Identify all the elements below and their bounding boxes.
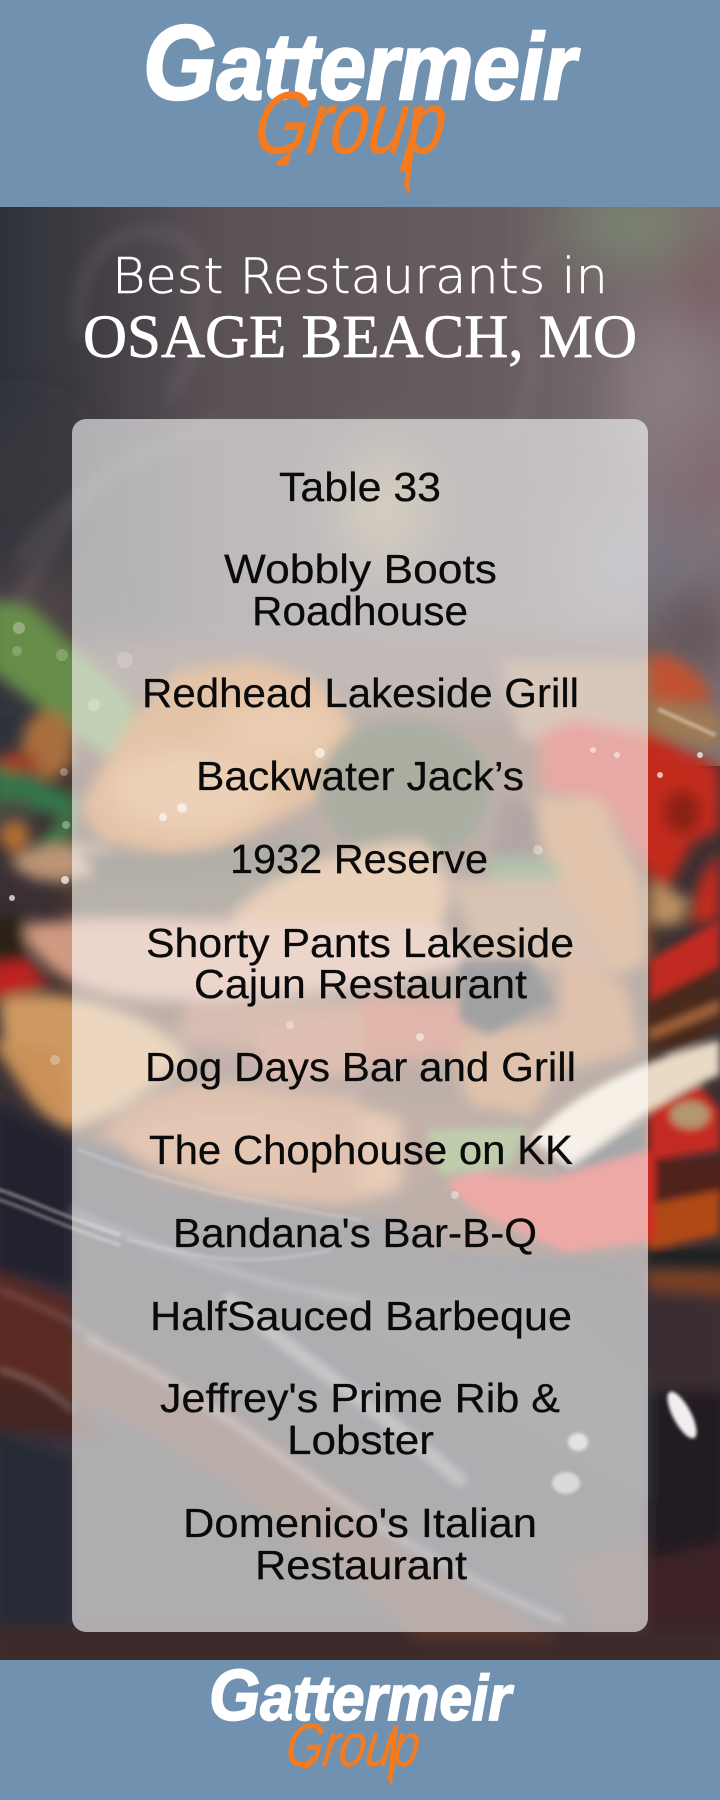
restaurant names: Shorty Pants Lakeside	[146, 920, 574, 966]
logo: header: Gattermeir	[143, 4, 580, 122]
restaurant names: Bandana's Bar-B-Q	[173, 1210, 537, 1256]
logo: footer	[209, 1656, 514, 1787]
potatoes	[0, 994, 190, 1130]
logo: header	[143, 4, 580, 195]
top right of food	[500, 660, 648, 740]
left greens	[0, 600, 150, 760]
logo: header: Group	[249, 73, 453, 172]
dark top-left	[0, 915, 28, 965]
restaurant names: Redhead Lakeside Grill	[142, 670, 579, 716]
title	[83, 248, 637, 371]
dark gap	[495, 800, 541, 857]
grey hole	[555, 1128, 644, 1171]
title: Best Restaurants in	[112, 248, 608, 305]
pan	[0, 1097, 720, 1670]
shrimp 1	[80, 660, 353, 857]
restaurant names: Backwater Jack’s	[196, 753, 524, 799]
restaurant names: Wobbly Boots	[224, 546, 497, 592]
shrimp 2	[233, 843, 448, 925]
broccoli	[320, 720, 490, 860]
restaurant names: Jeffrey's Prime Rib &	[160, 1375, 560, 1421]
ring piece	[458, 955, 640, 1115]
restaurant names: The Chophouse on KK	[149, 1127, 573, 1173]
big red pepper	[445, 1150, 655, 1253]
dark hole	[460, 960, 553, 1033]
red pepper	[537, 718, 720, 890]
steam	[0, 195, 720, 670]
wooden spoon	[648, 960, 720, 1055]
centre red strip	[350, 995, 475, 1065]
panel: restaurant list	[72, 419, 648, 1632]
dark area under shrimp + olives	[78, 834, 314, 880]
restaurant names: Dog Days Bar and Grill	[145, 1044, 576, 1090]
green	[427, 1127, 527, 1175]
restaurant names: 1932 Reserve	[230, 836, 488, 882]
restaurant names: Lobster	[287, 1417, 434, 1463]
restaurant names: Domenico's Italian	[183, 1500, 537, 1546]
pan highlights	[0, 1210, 560, 1620]
right lower peppers	[650, 1085, 720, 1160]
peel	[527, 797, 648, 975]
logo: footer: Group	[282, 1711, 425, 1779]
restaurant names: Roadhouse	[252, 588, 468, 634]
restaurant names: Table 33	[279, 464, 441, 510]
onion	[530, 1040, 720, 1165]
restaurant names: Restaurant	[255, 1542, 468, 1588]
footer band	[0, 1660, 720, 1800]
logo: footer: Gattermeir	[209, 1656, 514, 1736]
restaurant names: Cajun Restaurant	[194, 961, 528, 1007]
speckles	[0, 710, 715, 1260]
food base	[72, 640, 652, 1260]
header band	[0, 0, 720, 207]
restaurant names: HalfSauced Barbeque	[150, 1293, 572, 1339]
restaurant names	[142, 464, 579, 1588]
shrimp 3	[97, 1082, 400, 1205]
title: OSAGE BEACH, MO	[83, 304, 637, 371]
onion band	[20, 921, 470, 1000]
